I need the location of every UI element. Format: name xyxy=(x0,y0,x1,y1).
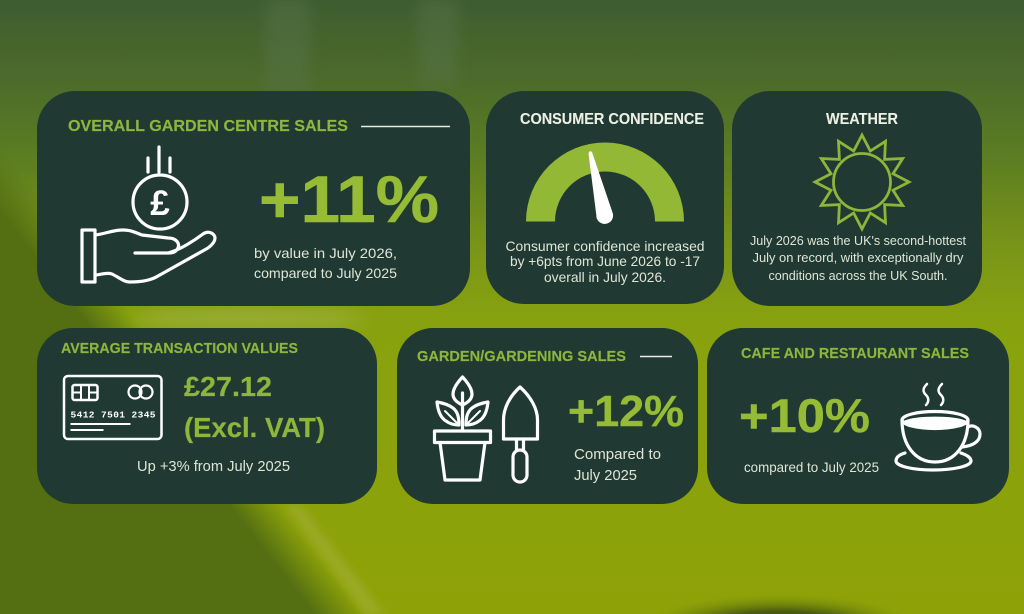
icon: potted plant xyxy=(434,377,490,480)
icon: pound sign: £ xyxy=(150,184,170,223)
stat: £27.12: £27.12 xyxy=(184,371,272,402)
stat: +10%: +10% xyxy=(739,389,870,442)
text: weather body: July 2026 was the UK's second-hottest xyxy=(750,234,967,248)
text: weather body: July on record, with exceptionally dry xyxy=(752,251,964,265)
panel: consumer confidence xyxy=(486,91,724,304)
stat: excl. VAT: (Excl. VAT) xyxy=(184,412,325,443)
text: by value: by value in July 2026, xyxy=(254,245,397,261)
text: weather body xyxy=(750,234,967,283)
gauge needle xyxy=(588,151,613,224)
icon: sun xyxy=(815,135,909,229)
stat: +11%: +11% xyxy=(259,162,439,236)
panel: average transaction values xyxy=(37,328,377,504)
stat: +12%: +12% xyxy=(568,387,684,436)
heading: average transaction values: AVERAGE TRANSACTION VALUES xyxy=(61,340,298,357)
icon: hand holding pound coin xyxy=(82,147,215,282)
heading: overall garden centre sales: OVERALL GARDEN CENTRE SALES xyxy=(68,118,348,135)
panel: overall garden centre sales xyxy=(37,91,470,306)
text: weather body: conditions across the UK South. xyxy=(768,269,948,283)
heading: garden/gardening sales: GARDEN/GARDENING SALES xyxy=(417,348,626,365)
panel: weather xyxy=(732,91,982,306)
heading: cafe and restaurant sales: CAFE AND RESTAURANT SALES xyxy=(741,345,969,362)
text: compared to July 2025: Compared to xyxy=(574,446,661,463)
text: by value xyxy=(254,245,397,281)
text: compared to July 2025: July 2025 xyxy=(574,467,637,484)
icon: coffee cup xyxy=(896,384,980,470)
text: by value: compared to July 2025 xyxy=(254,265,397,281)
panel: cafe and restaurant sales xyxy=(707,328,1009,504)
panel: garden/gardening sales xyxy=(397,328,698,504)
icon: credit card: 5412 7501 2345 xyxy=(70,410,156,420)
icon: trowel xyxy=(504,387,538,482)
text: consumer confidence body: overall in July 2026. xyxy=(544,269,666,285)
text: consumer confidence body: by +6pts from June 2026 to -17 xyxy=(510,253,700,269)
text: consumer confidence body xyxy=(506,238,704,285)
icon: credit card xyxy=(64,376,162,439)
text: compared to July 2025: compared to July 2025 xyxy=(744,459,879,475)
heading: weather: WEATHER xyxy=(826,111,898,128)
chart: gauge xyxy=(526,142,684,224)
text: up 3%: Up +3% from July 2025 xyxy=(137,458,290,475)
text: consumer confidence body: Consumer confidence increased xyxy=(506,238,704,254)
heading: consumer confidence: CONSUMER CONFIDENCE xyxy=(520,111,704,128)
text: compared to July 2025 xyxy=(574,446,661,484)
